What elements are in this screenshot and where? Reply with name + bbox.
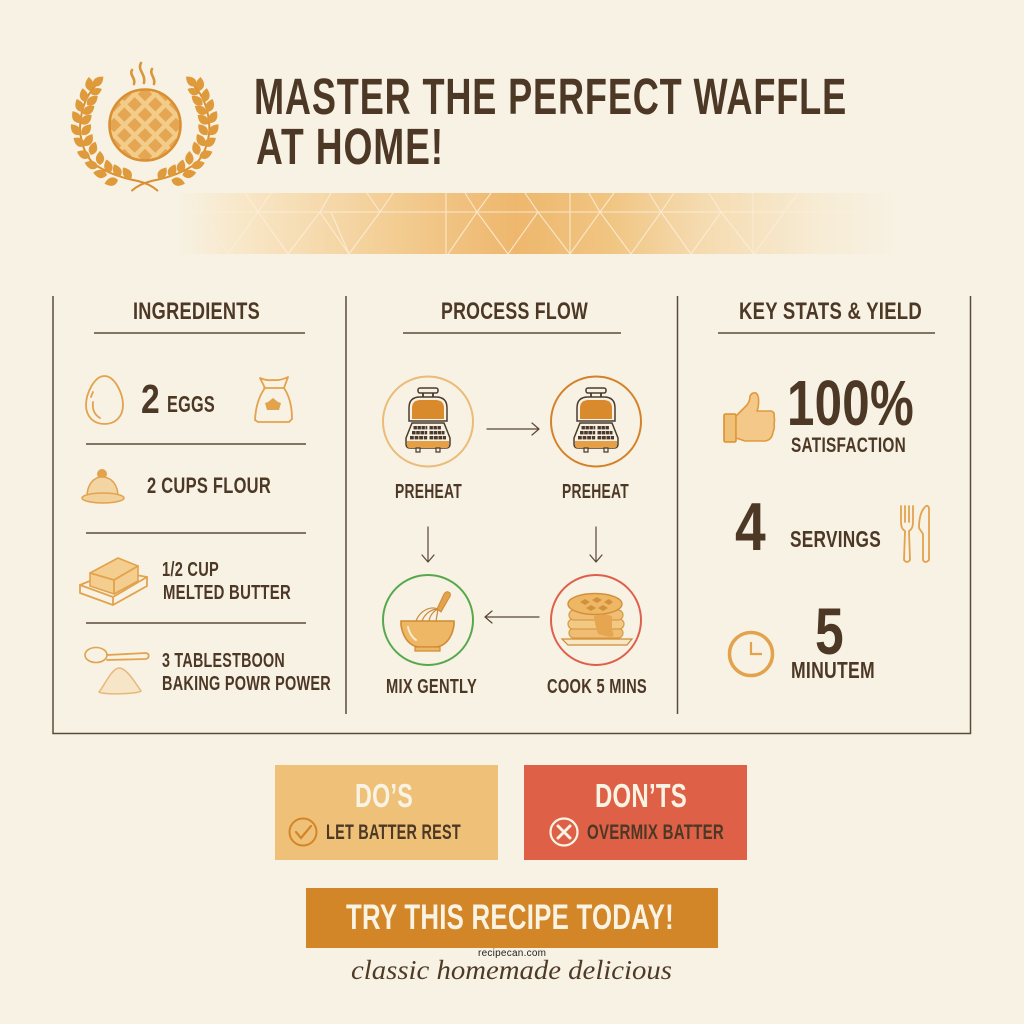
step: preheat 1: PREHEAT	[395, 481, 462, 503]
text: 2 eggs: EGGS	[167, 391, 215, 417]
heading: process flow: PROCESS FLOW	[441, 298, 588, 325]
text: 2 eggs: 2	[141, 376, 160, 422]
icon: butter	[80, 558, 147, 605]
stat: 100% satisfaction	[787, 367, 914, 457]
step: preheat 1	[383, 376, 473, 503]
arrow: down left	[422, 527, 434, 562]
step: mix gently: MIX GENTLY	[386, 676, 477, 698]
stat: 100% satisfaction: SATISFACTION	[791, 434, 906, 457]
step: preheat 2: PREHEAT	[562, 481, 629, 503]
stat: 100% satisfaction: 100%	[787, 367, 914, 439]
step: cook 5 mins: COOK 5 MINS	[547, 676, 647, 698]
stat: 4 servings	[735, 489, 881, 565]
panel: don'ts: OVERMIX BATTER	[587, 821, 724, 844]
text: 2 eggs	[141, 376, 215, 422]
icon: cross	[550, 818, 578, 846]
panel: ingredients	[80, 298, 331, 695]
main panel frame	[53, 296, 970, 734]
stat: 4 servings: 4	[735, 489, 766, 565]
arrow: right	[487, 423, 539, 435]
step: cook 5 mins	[547, 575, 647, 698]
panel: key stats and yield	[718, 298, 935, 683]
text: baking powder	[162, 650, 331, 695]
panel: don'ts	[524, 765, 747, 860]
text: baking powder: BAKING POWR POWER	[162, 673, 331, 695]
text: baking powder: 3 TABLESTBOON	[162, 650, 285, 672]
heading: ingredients: INGREDIENTS	[133, 298, 260, 325]
icon: cloche	[82, 469, 124, 503]
call to action button	[306, 888, 718, 948]
arrow: left	[485, 611, 539, 623]
panel: don'ts: DON’TS	[595, 777, 687, 814]
panel: do's: DO’S	[355, 777, 413, 814]
icon: flour sack	[255, 377, 292, 422]
text: butter: MELTED BUTTER	[163, 582, 291, 604]
icon: egg	[86, 376, 123, 424]
panel: process flow	[383, 298, 647, 698]
step: mix gently	[383, 575, 477, 698]
title	[254, 68, 847, 175]
icon: spoon and powder	[85, 648, 149, 694]
heading: key stats: KEY STATS & YIELD	[739, 298, 922, 325]
logo: waffle in laurel wreath	[70, 62, 218, 192]
stat: 5 minutes	[791, 594, 875, 683]
stat: 5 minutes: MINUTEM	[791, 657, 875, 683]
title: AT HOME!	[256, 118, 444, 175]
text: flour: 2 CUPS FLOUR	[147, 473, 271, 498]
source credit: recipecan.com	[478, 948, 546, 959]
stat: 4 servings: SERVINGS	[790, 526, 881, 552]
icon: clock	[730, 632, 772, 676]
panel: do's: LET BATTER REST	[326, 821, 461, 844]
text: butter	[162, 559, 291, 604]
icon: check	[290, 818, 316, 846]
decorative waffle pattern band	[175, 193, 900, 254]
arrow: down right	[590, 527, 602, 562]
step: preheat 2	[551, 376, 641, 503]
tagline: classic homemade delicious	[351, 955, 672, 985]
text: butter: 1/2 CUP	[162, 559, 219, 581]
panel: do's	[275, 765, 498, 860]
call to action button: TRY THIS RECIPE TODAY!	[346, 898, 674, 937]
icon: thumbs up	[724, 393, 774, 442]
icon: fork and knife	[901, 506, 929, 562]
stat: 5 minutes: 5	[815, 594, 844, 668]
